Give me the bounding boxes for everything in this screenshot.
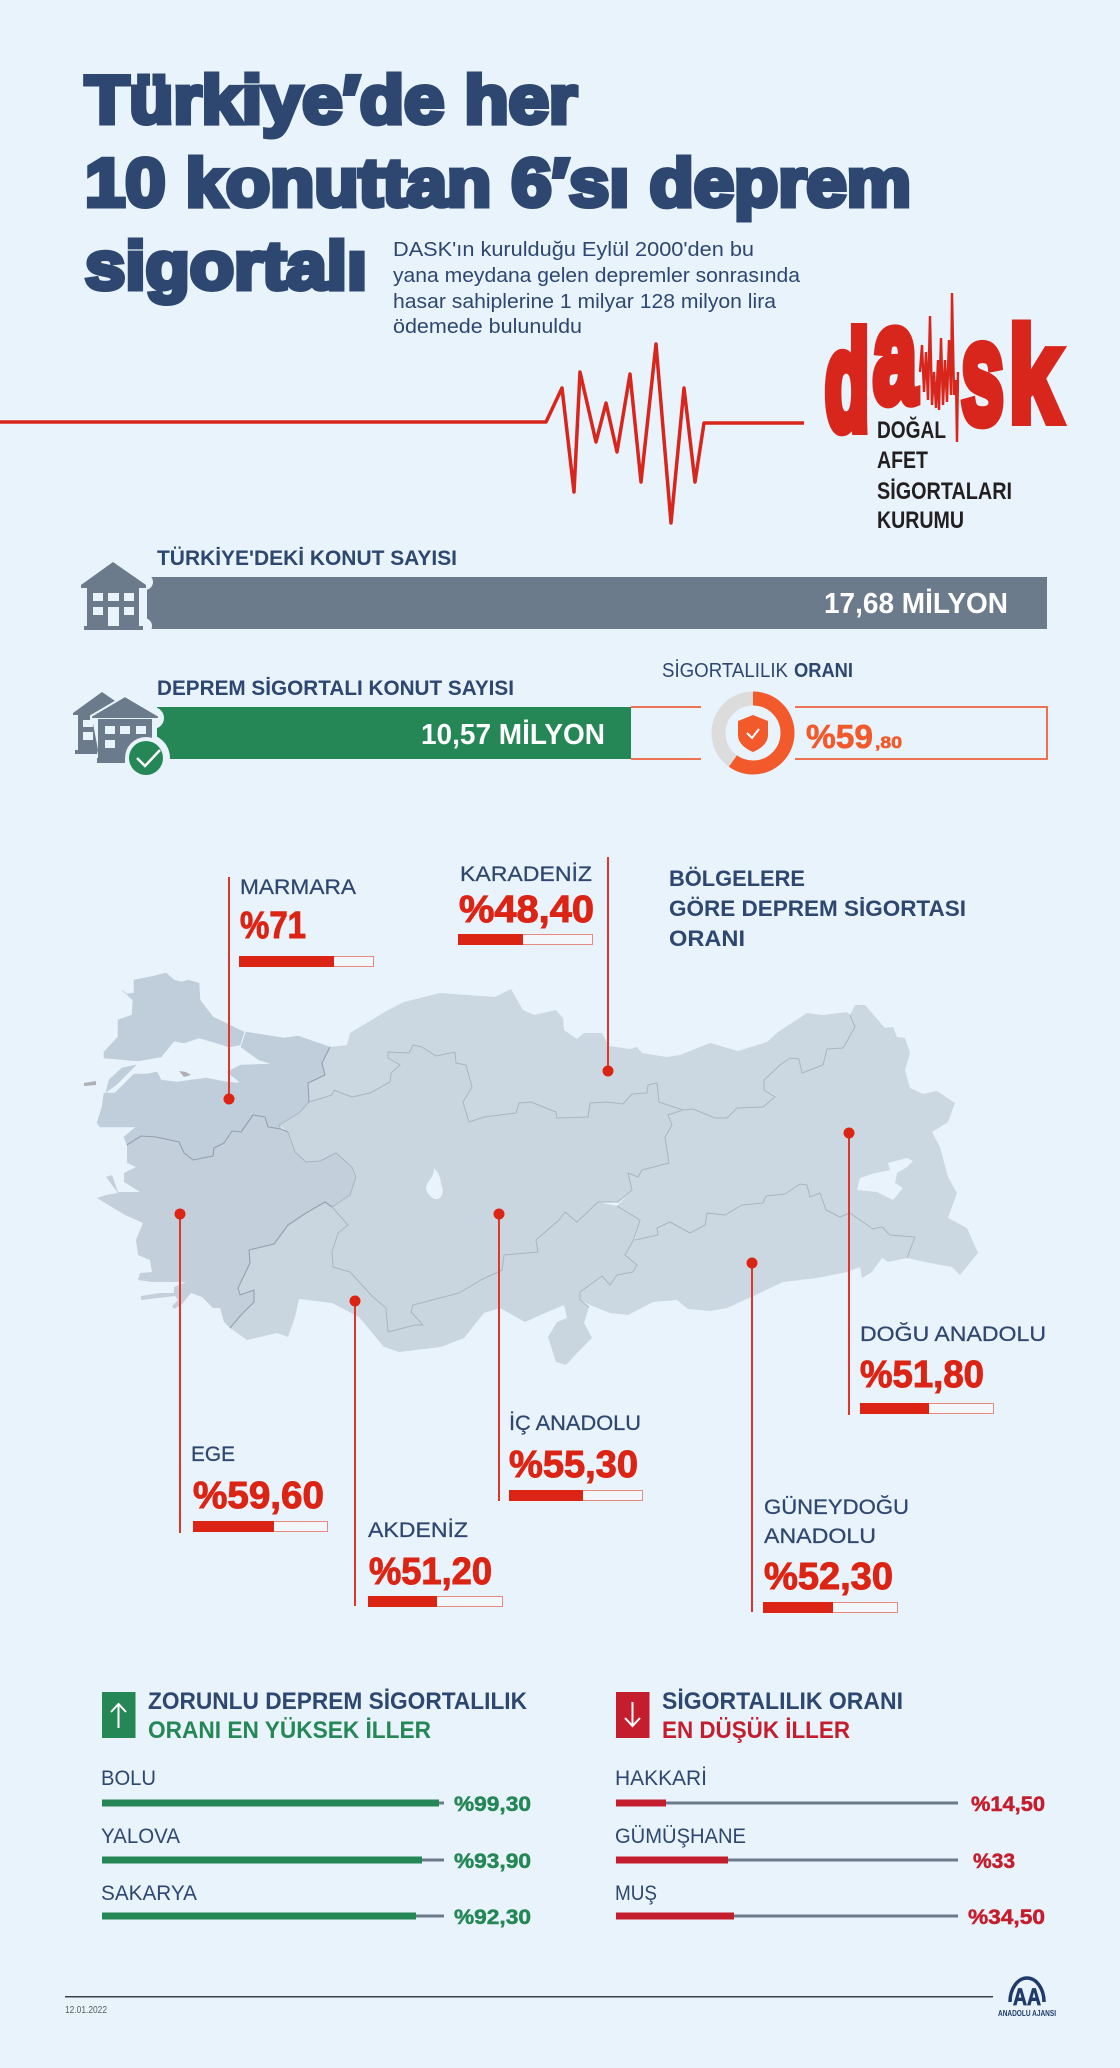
DASK logo: KURUMU [877, 507, 964, 534]
row: Bolu [101, 1767, 531, 1816]
panel: insurance rate: ORANI [794, 660, 853, 682]
callout: Güneydoğu Anadolu [746, 1258, 909, 1613]
panel: total housing [81, 547, 1047, 634]
icon: up arrow [102, 1692, 136, 1738]
bar: insured housing [122, 707, 631, 782]
logo: Anadolu Ajansı: AA [1013, 1984, 1041, 2011]
lake: Tuz [426, 1168, 443, 1199]
heading: insured housing: DEPREM SİGORTALI KONUT SAYISI [157, 677, 514, 700]
callout: Güneydoğu Anadolu: %52,30 [764, 1556, 893, 1598]
heading: highest provinces: ORANI EN YÜKSEK İLLER [148, 1717, 431, 1744]
region: Akdeniz [230, 1202, 640, 1365]
callout: Ege: %59,60 [193, 1475, 324, 1517]
callout: Doğu Anadolu: %51,80 [860, 1354, 984, 1396]
heading: highest provinces: ZORUNLU DEPREM SİGORTALILIK [148, 1688, 528, 1715]
heading: lowest provinces: EN DÜŞÜK İLLER [662, 1717, 850, 1744]
region: İç Anadolu [279, 1045, 683, 1332]
row: Hakkari: %14,50 [971, 1793, 1045, 1816]
DASK logo: SİGORTALARI [877, 478, 1012, 505]
value: insurance rate [806, 718, 902, 755]
map heading: ORANI [669, 926, 745, 951]
value: insurance rate: ,80 [875, 733, 902, 752]
row: Muş: MUŞ [615, 1882, 657, 1905]
callout: İç Anadolu: İÇ ANADOLU [509, 1412, 641, 1435]
row: Hakkari: HAKKARİ [615, 1767, 707, 1790]
region: Marmara [84, 973, 330, 1160]
callout: Akdeniz: AKDENİZ [368, 1519, 468, 1542]
row: Sakarya: SAKARYA [101, 1882, 197, 1905]
DASK logo: d [825, 305, 869, 459]
row: Sakarya [101, 1882, 531, 1929]
map heading: BÖLGELERE [669, 866, 805, 891]
callout: Karadeniz: KARADENİZ [460, 863, 592, 886]
row: Yalova [101, 1825, 531, 1873]
heading: lowest provinces [662, 1688, 903, 1744]
row: Muş [615, 1882, 1045, 1929]
heading: insurance rate: SİGORTALILIK [662, 659, 789, 682]
donut chart [718, 698, 788, 768]
callout: İç Anadolu [494, 1208, 642, 1501]
panel: lowest provinces [615, 1688, 1045, 1929]
region: Ege [97, 1115, 356, 1328]
value: insurance rate: %59 [806, 718, 873, 755]
DASK logo: k [1008, 299, 1062, 451]
callout: Marmara: %71 [240, 905, 306, 947]
title: sigortalı [85, 228, 367, 304]
row: Hakkari [615, 1767, 1045, 1816]
icon: down arrow [616, 1692, 650, 1738]
footer [65, 1978, 1056, 2018]
panel: insured housing [73, 677, 631, 782]
row: Yalova: %93,90 [454, 1850, 531, 1873]
lake: Van [857, 1158, 913, 1200]
callout: Güneydoğu Anadolu: ANADOLU [764, 1525, 876, 1548]
title: 10 konuttan 6′sı deprem [85, 145, 911, 221]
DASK logo: AFET [877, 447, 928, 474]
callout: İç Anadolu: %55,30 [509, 1444, 638, 1486]
bar: total housing [136, 574, 1047, 634]
rate frame [631, 707, 1047, 759]
heading: total housing: TÜRKİYE'DEKİ KONUT SAYISI [157, 547, 457, 570]
intro text: yana meydana gelen depremler sonrasında [393, 265, 801, 287]
row: Sakarya: %92,30 [454, 1906, 531, 1929]
callout: Karadeniz [458, 857, 614, 1076]
panel: insurance rate [631, 659, 1047, 768]
row: Muş: %34,50 [968, 1906, 1045, 1929]
map heading [669, 866, 966, 951]
DASK logo: DOĞAL [877, 416, 946, 444]
title: Türkiye′de her [85, 62, 577, 138]
value: insured housing: 10,57 MİLYON [421, 719, 605, 751]
map heading: GÖRE DEPREM SİGORTASI [669, 896, 966, 921]
callout: Akdeniz: %51,20 [369, 1551, 492, 1593]
callout: Marmara [224, 876, 374, 1104]
DASK logo: s [961, 292, 1004, 454]
intro text [393, 239, 801, 338]
panel: highest provinces [101, 1688, 531, 1929]
seismograph line [0, 344, 804, 523]
intro text: ödemede bulunuldu [393, 316, 582, 338]
value: total housing: 17,68 MİLYON [824, 588, 1008, 620]
callout: Karadeniz: %48,40 [459, 889, 594, 931]
callout: Ege [174, 1208, 328, 1533]
callout: Doğu Anadolu [844, 1128, 1046, 1415]
map of Türkiye [84, 973, 978, 1365]
callout: Ege: EGE [191, 1443, 235, 1466]
row: Yalova: YALOVA [101, 1825, 180, 1848]
date: 12.01.2022 [65, 2005, 107, 2016]
title [85, 62, 911, 304]
logo: Anadolu Ajansı: ANADOLU AJANSI [998, 2008, 1056, 2018]
callout: Marmara: MARMARA [240, 876, 356, 899]
icon: houses with check [73, 692, 167, 779]
region: Doğu Anadolu [617, 1005, 978, 1275]
row: Gümüşhane [615, 1825, 1015, 1873]
heading: lowest provinces: SİGORTALILIK ORANI [662, 1688, 903, 1715]
region borders [127, 1015, 915, 1332]
row: Gümüşhane: %33 [973, 1850, 1015, 1873]
icon: house [81, 562, 146, 630]
intro text: hasar sahiplerine 1 milyar 128 milyon lira [393, 291, 777, 313]
callout: Güneydoğu Anadolu: GÜNEYDOĞU [764, 1496, 909, 1519]
callout: Doğu Anadolu: DOĞU ANADOLU [860, 1323, 1046, 1346]
region: Güneydoğu Anadolu [580, 1184, 915, 1315]
DASK logo [825, 280, 1062, 534]
icon: shield [738, 715, 768, 752]
callout: Akdeniz [350, 1296, 502, 1607]
logo: Anadolu Ajansı [998, 1978, 1056, 2018]
DASK logo: a [873, 280, 918, 431]
row: Gümüşhane: GÜMÜŞHANE [615, 1825, 746, 1848]
row: Bolu: %99,30 [454, 1793, 531, 1816]
heading: highest provinces [148, 1688, 528, 1744]
intro text: DASK'ın kurulduğu Eylül 2000'den bu [393, 239, 754, 261]
row: Bolu: BOLU [101, 1767, 156, 1790]
region: Karadeniz [308, 989, 855, 1122]
